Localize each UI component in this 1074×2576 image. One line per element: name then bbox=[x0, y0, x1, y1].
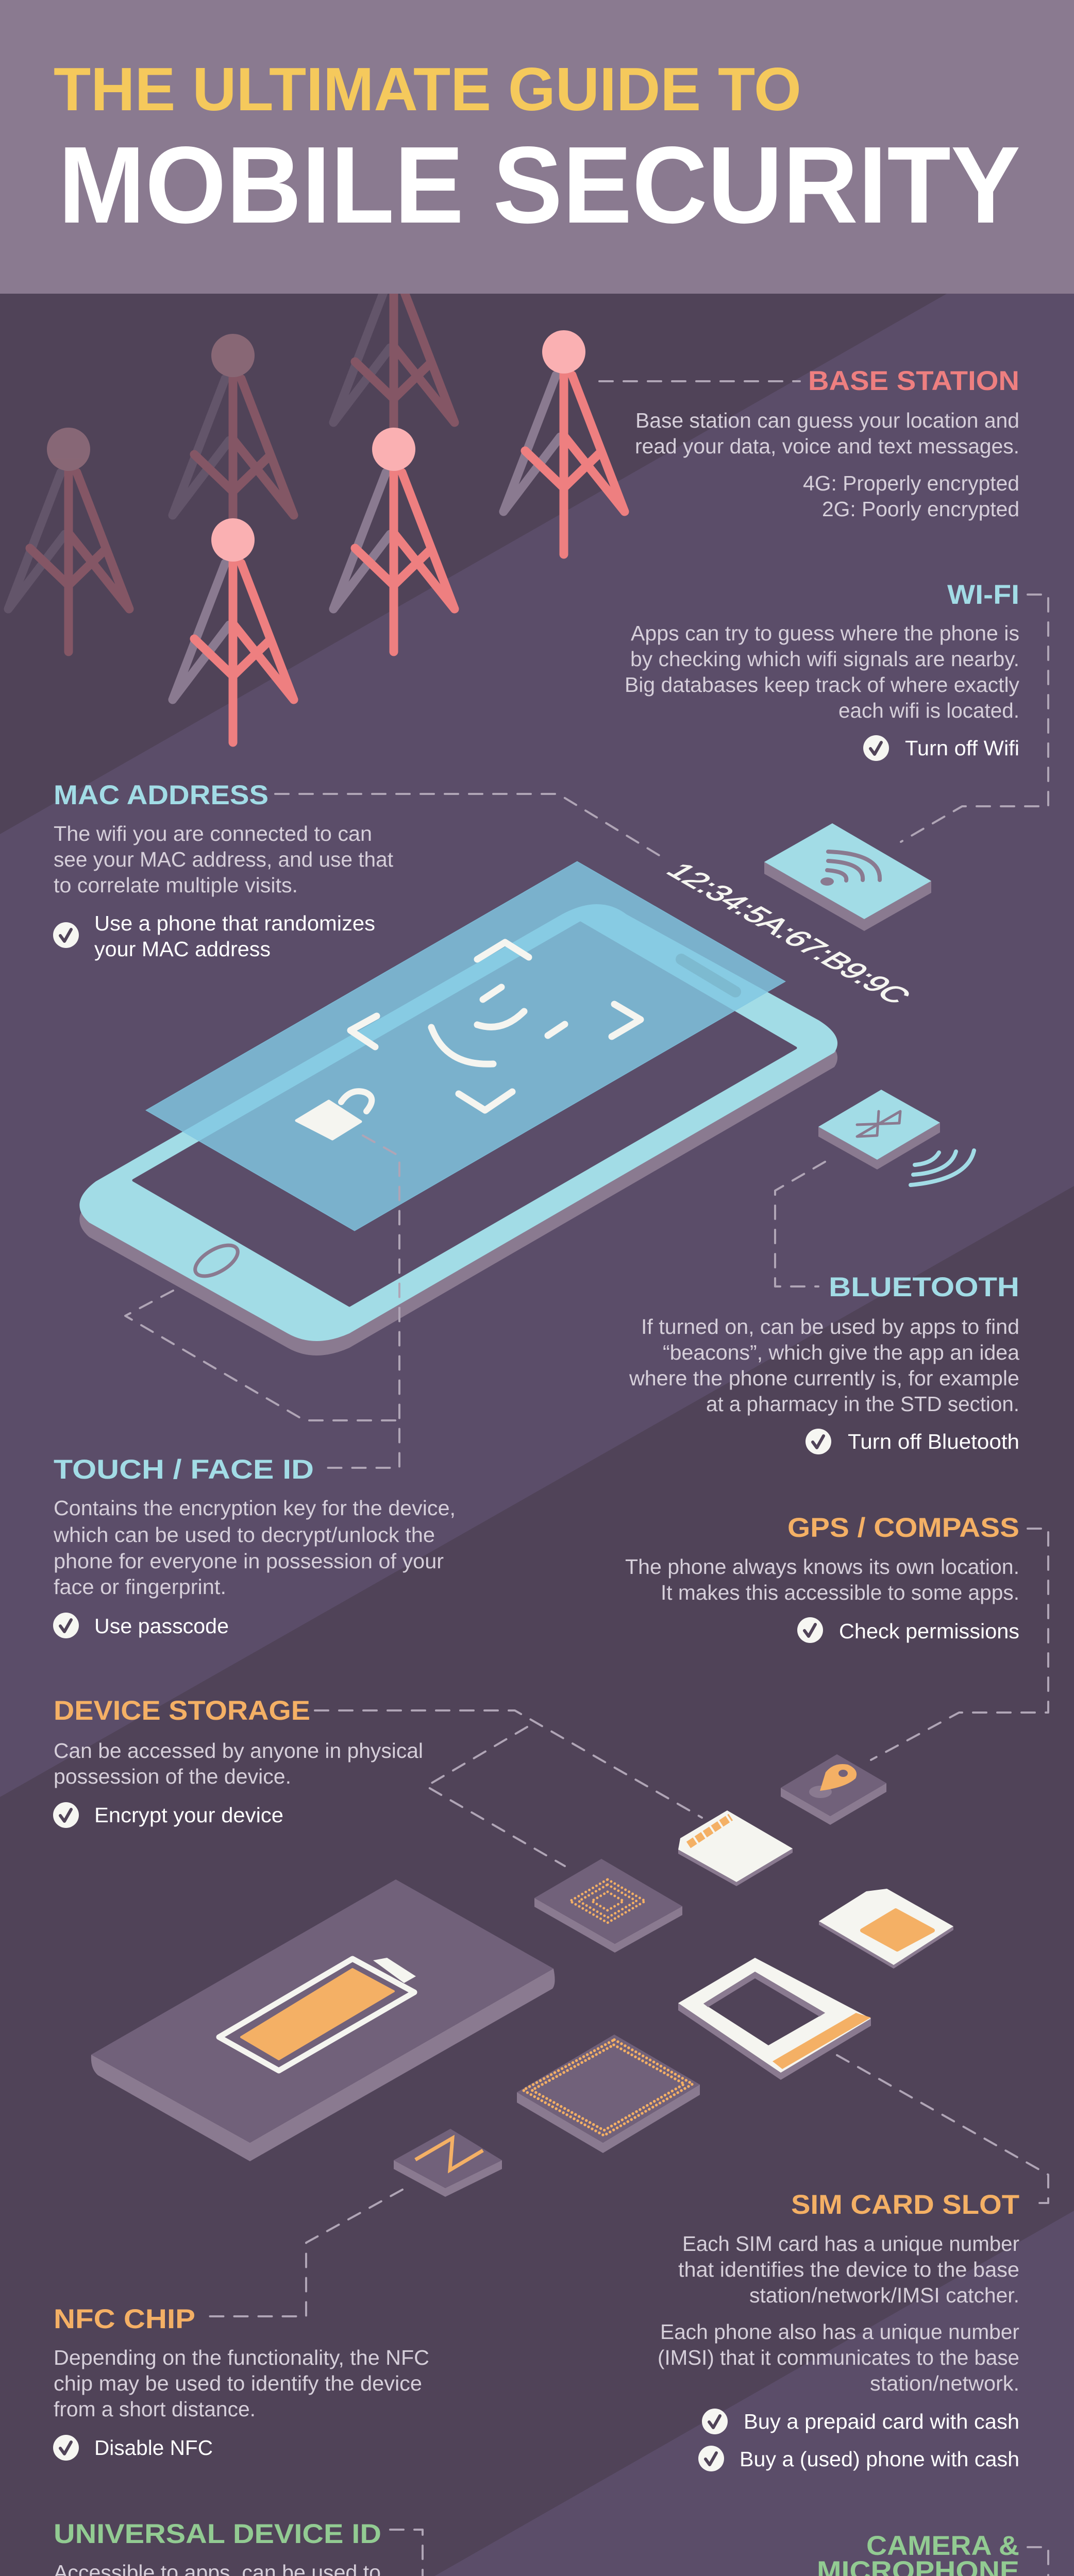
text block: Can be accessed by anyone in physical bbox=[54, 1739, 423, 1762]
text block: 2G: Poorly encrypted bbox=[822, 497, 1019, 521]
connector: storage chip bbox=[426, 1727, 565, 1866]
connector: home button bbox=[125, 1291, 399, 1420]
illustration: base station towers bbox=[8, 241, 625, 742]
text block: see your MAC address, and use that bbox=[54, 848, 394, 871]
connector: sd card bbox=[315, 1710, 702, 1818]
panel: touch / face id bbox=[53, 1136, 456, 1638]
check item: Turn off Bluetooth bbox=[848, 1430, 1019, 1453]
connector bbox=[599, 380, 800, 382]
title line 1: THE ULTIMATE GUIDE TO bbox=[54, 55, 801, 124]
text block bbox=[54, 822, 394, 897]
text block: face or fingerprint. bbox=[54, 1575, 226, 1599]
icon: bluetooth tile bbox=[818, 1090, 974, 1185]
text block: Each SIM card has a unique number bbox=[682, 2232, 1019, 2256]
check item: Buy a prepaid card with cash bbox=[744, 2410, 1019, 2433]
icon: tower middle bbox=[333, 428, 455, 652]
text block: Depending on the functionality, the NFC bbox=[54, 2346, 429, 2369]
speaker bbox=[681, 959, 735, 992]
check item bbox=[53, 911, 375, 961]
check item: Turn off Wifi bbox=[905, 736, 1019, 760]
text block: It makes this accessible to some apps. bbox=[661, 1581, 1019, 1604]
check item bbox=[53, 2435, 213, 2461]
text block: If turned on, can be used by apps to find bbox=[641, 1315, 1019, 1338]
illustration: phone with face id bbox=[79, 858, 919, 1355]
text block: which can be used to decrypt/unlock the bbox=[53, 1523, 435, 1547]
text block bbox=[629, 1315, 1019, 1416]
illustration: battery slab bbox=[91, 1879, 555, 2161]
connector bbox=[901, 595, 1048, 842]
text block: The phone always knows its own location. bbox=[625, 1555, 1019, 1579]
text block: that identifies the device to the base bbox=[678, 2258, 1019, 2281]
connector bbox=[390, 2530, 531, 2576]
check item bbox=[863, 735, 1019, 761]
text block: where the phone currently is, for example bbox=[629, 1366, 1019, 1390]
check item: your MAC address bbox=[94, 937, 271, 961]
heading: GPS / COMPASS bbox=[787, 1513, 1019, 1543]
text block: (IMSI) that it communicates to the base bbox=[658, 2346, 1019, 2369]
text block: chip may be used to identify the device bbox=[54, 2371, 422, 2395]
text block: station/network/IMSI catcher. bbox=[749, 2283, 1019, 2307]
phone depth bbox=[79, 919, 837, 1355]
text block: each wifi is located. bbox=[838, 699, 1019, 722]
illustration: storage chip bbox=[534, 1859, 682, 1953]
icon: faded tower middle bbox=[173, 334, 294, 558]
text block bbox=[54, 1739, 423, 1788]
translucent face id plane bbox=[146, 861, 785, 1231]
heading: TOUCH / FACE ID bbox=[54, 1454, 314, 1485]
text block: phone for everyone in possession of your bbox=[54, 1549, 444, 1573]
panel: universal device id bbox=[53, 2519, 531, 2576]
illustration: sim tray bbox=[678, 1958, 871, 2080]
text block bbox=[54, 2346, 429, 2421]
text block: “beacons”, which give the app an idea bbox=[663, 1341, 1019, 1364]
illustration: large chip bbox=[517, 2035, 700, 2153]
icon: battery bbox=[219, 1958, 416, 2071]
connector bbox=[871, 1529, 1048, 1760]
title line 2: MOBILE SECURITY bbox=[58, 124, 1020, 246]
check item: Disable NFC bbox=[94, 2436, 213, 2460]
icon: tower front bbox=[173, 518, 294, 742]
text block: to correlate multiple visits. bbox=[54, 873, 298, 897]
heading: DEVICE STORAGE bbox=[54, 1696, 310, 1726]
text block bbox=[635, 409, 1019, 521]
check item: Use a phone that randomizes bbox=[94, 911, 375, 935]
text block: Contains the encryption key for the device, bbox=[54, 1496, 456, 1520]
panel: gps / compass bbox=[625, 1513, 1048, 1760]
text block: possession of the device. bbox=[54, 1765, 291, 1788]
text block: from a short distance. bbox=[54, 2397, 256, 2421]
icon: faded tower back bbox=[333, 241, 455, 465]
phone body bbox=[79, 904, 837, 1341]
connector bbox=[206, 2190, 402, 2316]
check item: Check permissions bbox=[839, 1619, 1019, 1643]
text block: The wifi you are connected to can bbox=[54, 822, 372, 845]
check item: Encrypt your device bbox=[94, 1803, 283, 1827]
illustration: sim card bbox=[819, 1889, 953, 1969]
panel: mac address bbox=[53, 780, 661, 961]
heading: WI-FI bbox=[947, 580, 1019, 610]
text block: Big databases keep track of where exactly bbox=[625, 673, 1019, 697]
icon: tower right bbox=[504, 330, 625, 554]
panel: bluetooth bbox=[629, 1162, 1019, 1454]
icon: open padlock bbox=[296, 1091, 372, 1139]
text block: 4G: Properly encrypted bbox=[803, 471, 1019, 495]
icon: wifi tile bbox=[764, 823, 931, 931]
text block: station/network. bbox=[870, 2371, 1019, 2395]
heading: BLUETOOTH bbox=[829, 1272, 1019, 1302]
panel: device storage bbox=[53, 1696, 702, 1866]
panel: sim card slot bbox=[658, 2055, 1048, 2471]
text block: at a pharmacy in the STD section. bbox=[706, 1392, 1019, 1416]
connector bbox=[775, 1162, 825, 1286]
text block bbox=[658, 2232, 1019, 2395]
heading bbox=[817, 2531, 1019, 2576]
face id marks bbox=[350, 942, 641, 1110]
illustration: gps tile bbox=[781, 1754, 886, 1825]
text block bbox=[625, 621, 1019, 722]
header panel bbox=[0, 0, 1074, 294]
connector: lock to heading bbox=[324, 1136, 399, 1468]
phone screen bbox=[133, 923, 796, 1306]
rotated mac address: 12:34:5A:67:B9:9C bbox=[659, 858, 919, 1008]
text block: read your data, voice and text messages. bbox=[635, 434, 1019, 458]
heading: BASE STATION bbox=[808, 366, 1019, 396]
text block bbox=[625, 1555, 1019, 1604]
home button bbox=[190, 1239, 243, 1282]
check item: Use passcode bbox=[94, 1614, 229, 1638]
heading: MAC ADDRESS bbox=[54, 780, 268, 810]
illustration: sd card bbox=[678, 1810, 793, 1886]
text block: by checking which wifi signals are nearby. bbox=[630, 647, 1019, 671]
heading: CAMERA & bbox=[866, 2531, 1019, 2561]
heading: NFC CHIP bbox=[54, 2304, 195, 2334]
connector bbox=[837, 2055, 1048, 2203]
text block bbox=[53, 1496, 456, 1599]
text block: Each phone also has a unique number bbox=[660, 2320, 1019, 2344]
heading: SIM CARD SLOT bbox=[791, 2190, 1019, 2220]
panel: base station bbox=[599, 366, 1019, 521]
heading: UNIVERSAL DEVICE ID bbox=[54, 2519, 381, 2549]
illustration: nfc tile bbox=[394, 2129, 502, 2197]
text block: Base station can guess your location and bbox=[635, 409, 1019, 432]
icon: faded tower left bbox=[8, 428, 129, 652]
panel: camera and microphone bbox=[681, 2531, 1055, 2576]
connector: microphone bbox=[928, 2547, 1048, 2576]
text block: Apps can try to guess where the phone is bbox=[631, 621, 1019, 645]
connector bbox=[275, 794, 661, 856]
panel: nfc chip bbox=[53, 2190, 429, 2461]
check item: Buy a (used) phone with cash bbox=[740, 2447, 1019, 2471]
panel: wi-fi bbox=[625, 580, 1048, 842]
